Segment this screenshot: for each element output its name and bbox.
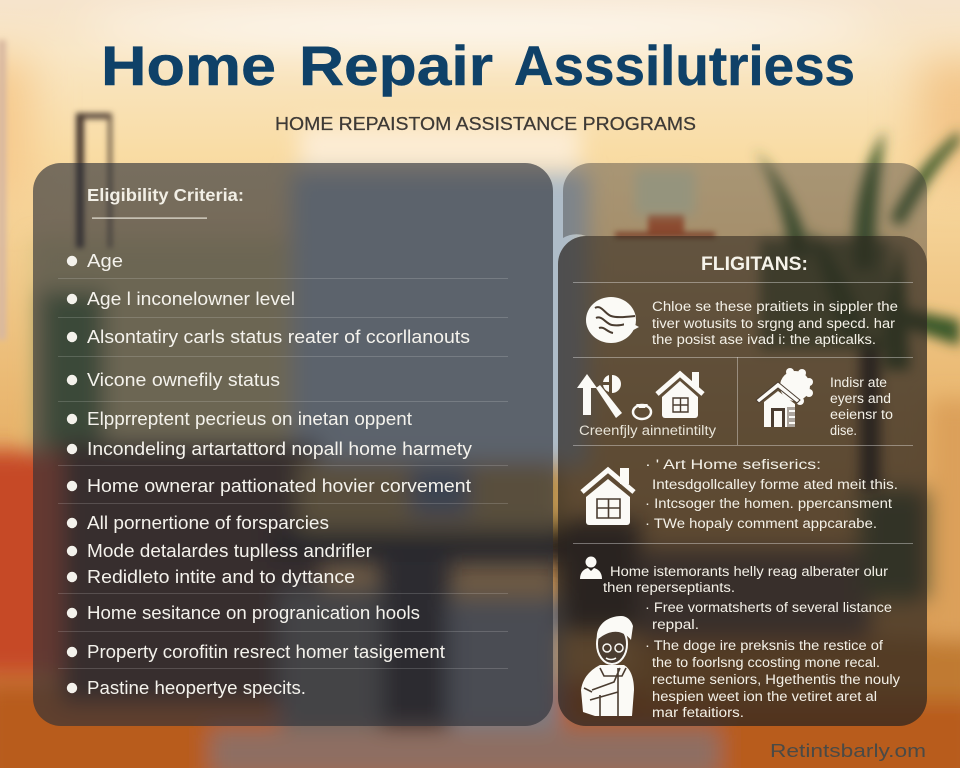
text block: right cell: dise.	[830, 423, 857, 438]
text block: representatives: hespien weet ion the vetiret aret al	[652, 689, 877, 704]
icon: arrow and tools	[577, 374, 651, 419]
panel: fligitans	[558, 236, 927, 726]
criteria list: Mode detalardes tuplless andrifler	[87, 540, 372, 561]
title: Home	[101, 34, 276, 97]
subtitle: HOME REPAISTOM ASSISTANCE PROGRAMS	[275, 114, 696, 134]
icon: hand and waves	[586, 297, 639, 343]
icon: small person	[580, 556, 602, 579]
criteria list: Age	[87, 250, 123, 271]
text block: intro: Chloe se these praitiets in sippler the	[652, 299, 898, 314]
heading: eligibility criteria: Eligibility Criteria:	[87, 185, 244, 205]
text block: representatives: · Free vormatsherts of several listance	[645, 600, 892, 615]
icon: senior person	[581, 616, 634, 716]
text block: home services: · ' Art Home sefiserics:	[645, 457, 821, 472]
title	[101, 34, 855, 97]
text block: representatives: · The doge ire preksnis the restice of	[645, 638, 883, 653]
text block: representatives	[603, 564, 900, 720]
text block: right cell	[830, 375, 893, 438]
text block: home services	[645, 457, 898, 531]
text block: right cell: eyers and	[830, 391, 891, 406]
criteria list: Pastine heopertye specits.	[87, 677, 306, 698]
text block: right cell: eeiensr to	[830, 407, 893, 422]
text block: home services: Intesdgollcalley forme ated meit this.	[652, 477, 898, 492]
text block: intro: the posist ase ivad i: the apticalks.	[652, 332, 876, 347]
text block: representatives: reppal.	[652, 617, 699, 632]
caption: left cell: Creenfjly ainnetintilty	[579, 423, 716, 438]
criteria list: Incondeling artartattord nopall home harmety	[87, 438, 473, 459]
text block: representatives: the to foorlsng ccosting mone recal.	[652, 655, 880, 670]
panel: eligibility criteria	[33, 163, 553, 726]
footer brand: Retintsbarly.om	[770, 741, 926, 761]
criteria list: Elpprreptent pecrieus on inetan oppent	[87, 408, 412, 429]
icon: house with gear	[756, 368, 813, 427]
text block: representatives: then reperseptiants.	[603, 580, 735, 595]
text block: intro: tiver wotusits to srgng and specd. har	[652, 316, 896, 331]
title: Repair	[299, 34, 493, 97]
text block: home services: · Intcsoger the homen. ppercansment	[645, 496, 892, 511]
text block: right cell: Indisr ate	[830, 375, 887, 390]
panel: secondary back card	[563, 163, 927, 264]
criteria list: Redidleto intite and to dyttance	[87, 566, 355, 587]
criteria list: Property corofitin resrect homer tasigement	[87, 641, 445, 662]
criteria list	[67, 250, 473, 698]
criteria list: Home sesitance on progranication hools	[87, 602, 420, 623]
text block: home services: · TWe hopaly comment appcarabe.	[645, 516, 877, 531]
heading underline	[92, 218, 207, 219]
icon: home	[582, 468, 634, 525]
panel heading: FLIGITANS:	[701, 253, 808, 275]
criteria list: Alsontatiry carls status reater of ccorllanouts	[87, 326, 470, 347]
text block: representatives: mar fetaitiors.	[652, 705, 744, 720]
criteria list: Vicone ownefily status	[87, 369, 280, 390]
criteria list: Age l inconelowner level	[87, 288, 295, 309]
text block: intro	[652, 299, 898, 347]
text block: representatives: Home istemorants helly reag alberater olur	[610, 564, 889, 579]
text block: representatives: rectume seniors, Hgethentis the nouly	[652, 672, 900, 687]
title: Asssilutriess	[514, 34, 855, 97]
criteria list: All pornertione of forsparcies	[87, 512, 329, 533]
icon: house	[657, 372, 703, 418]
criteria list: Home ownerar pattionated hovier corvement	[87, 475, 471, 496]
